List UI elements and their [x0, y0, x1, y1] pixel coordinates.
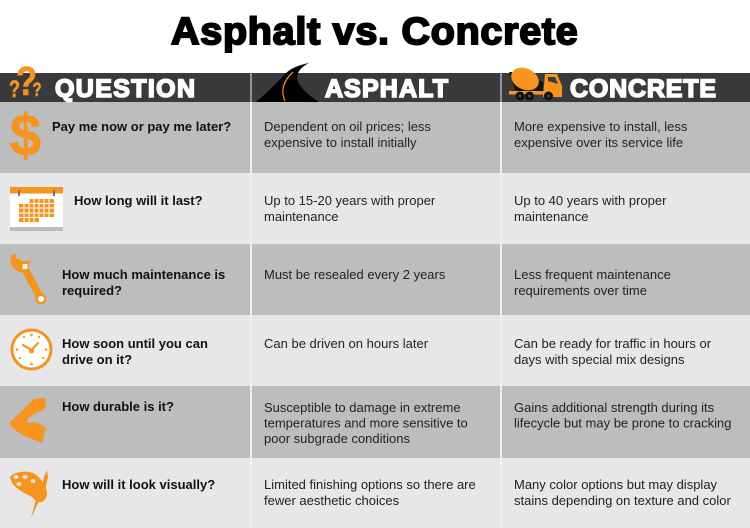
concrete answer 5: lifecycle but may be prone to cracking — [514, 416, 732, 430]
concrete answer 6: Many color options but may display — [514, 477, 717, 492]
icon: dollar: $ — [10, 103, 41, 168]
asphalt answer 2: Up to 15-20 years with proper — [264, 193, 435, 208]
icon: calendar — [10, 187, 63, 231]
heading: concrete: CONCRETE — [570, 75, 716, 103]
asphalt answer 2: maintenance — [264, 209, 338, 224]
concrete answer 1: More expensive to install, less — [514, 119, 687, 134]
icon: asphalt road — [256, 63, 319, 102]
question 5: How durable is it? — [62, 399, 174, 414]
heading: asphalt: ASPHALT — [325, 75, 448, 103]
row 6: visual — [10, 470, 731, 518]
icon: question marks: ? — [9, 76, 20, 103]
asphalt answer 4: Can be driven on hours later — [264, 336, 429, 351]
icon: question marks: ? — [16, 58, 37, 104]
asphalt answer 1: Dependent on oil prices; less — [264, 119, 431, 134]
asphalt answer 6: Limited finishing options so there are — [264, 477, 476, 492]
row 2: how long — [10, 187, 667, 231]
asphalt answer 5: temperatures and more sensitive to — [264, 416, 468, 430]
asphalt answer 3: Must be resealed every 2 years — [264, 267, 446, 282]
asphalt answer 1: expensive to install initially — [264, 135, 417, 150]
question 6: How will it look visually? — [62, 477, 215, 492]
question 3: How much maintenance is — [62, 267, 225, 282]
heading: question: QUESTION — [55, 75, 195, 103]
concrete answer 1: expensive over its service life — [514, 135, 683, 150]
icon: clock — [12, 330, 51, 369]
icon: concrete mixer truck — [507, 63, 562, 100]
asphalt answer 5: Susceptible to damage in extreme — [264, 400, 461, 415]
concrete answer 6: stains depending on texture and color — [514, 493, 731, 508]
concrete answer 4: days with special mix designs — [514, 352, 685, 367]
icon: question marks: ? — [32, 80, 42, 101]
icon: wrench — [10, 254, 46, 304]
row 1: pay now or later — [10, 103, 688, 168]
concrete answer 3: Less frequent maintenance — [514, 267, 671, 282]
title: Asphalt vs. Concrete — [171, 11, 579, 53]
header bar — [0, 73, 750, 102]
asphalt answer 5: poor subgrade conditions — [264, 431, 410, 446]
question 1: Pay me now or pay me later? — [52, 119, 231, 134]
concrete answer 4: Can be ready for traffic in hours or — [514, 336, 711, 351]
question 4: drive on it? — [62, 352, 132, 367]
row 5: durable — [10, 398, 732, 446]
row 3: maintenance — [10, 254, 671, 304]
asphalt answer 6: fewer aesthetic choices — [264, 493, 400, 508]
question 4: How soon until you can — [62, 336, 208, 351]
concrete answer 2: maintenance — [514, 209, 588, 224]
question 2: How long will it last? — [74, 193, 203, 208]
concrete answer 5: Gains additional strength during its — [514, 400, 714, 415]
icon: flexed arm — [10, 398, 46, 443]
row 4: drive on — [12, 330, 712, 369]
concrete answer 3: requirements over time — [514, 283, 647, 298]
icon: palette — [10, 470, 48, 518]
question 3: required? — [62, 283, 122, 298]
concrete answer 2: Up to 40 years with proper — [514, 193, 666, 208]
